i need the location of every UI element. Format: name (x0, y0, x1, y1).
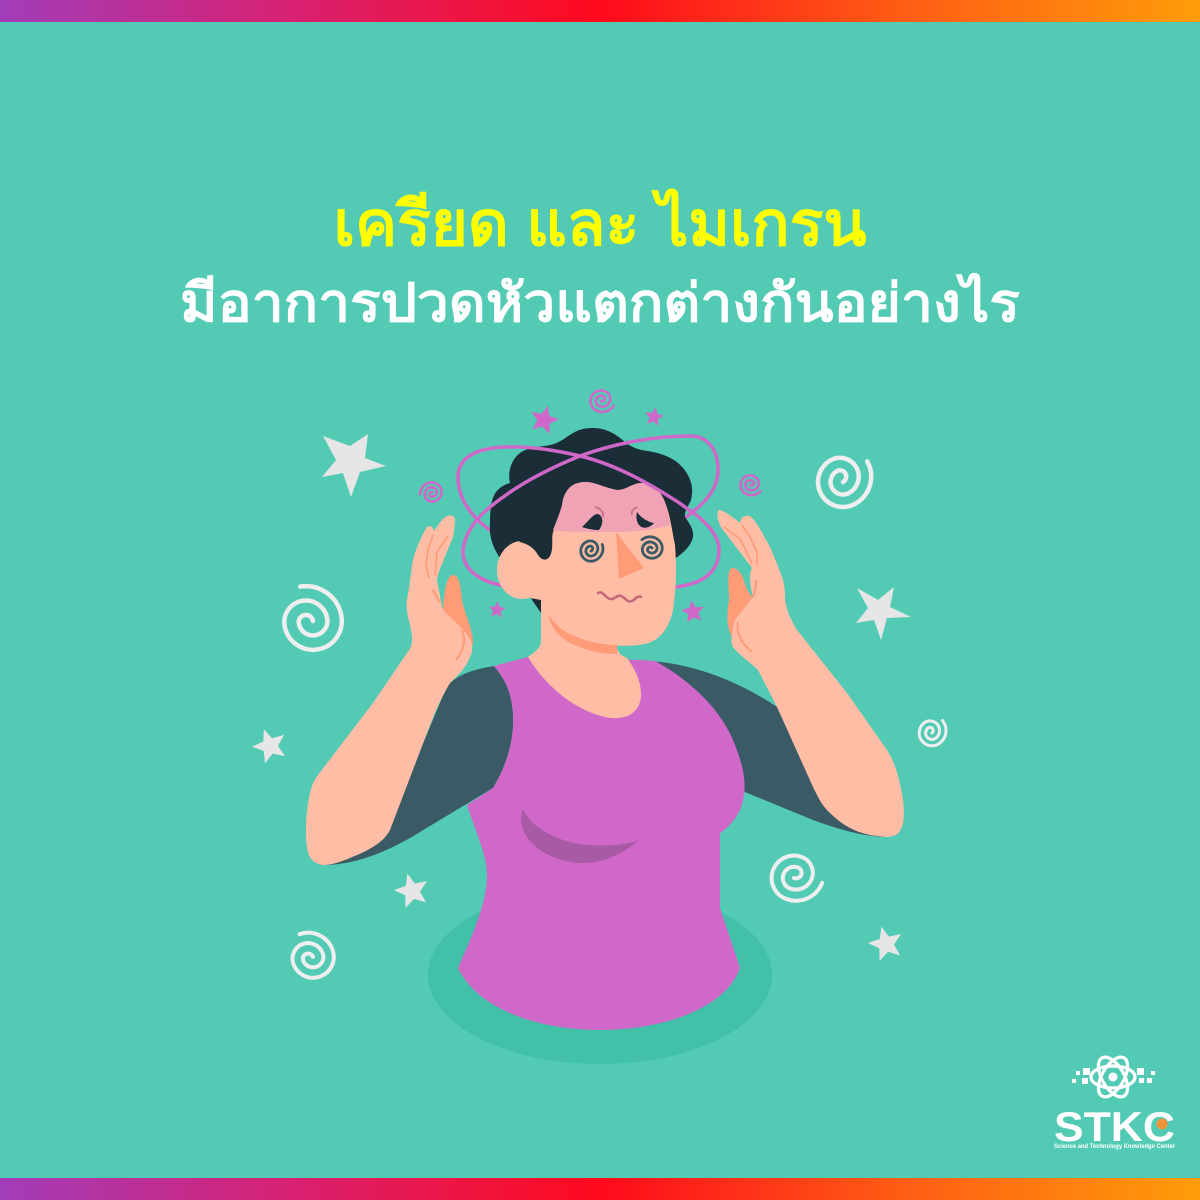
jaw shadow (548, 615, 617, 654)
left sleeve (323, 666, 513, 865)
logo wordmark: STKC (1054, 1103, 1175, 1150)
purple stars and spirals around head (420, 387, 765, 623)
logo: STKC (1054, 1052, 1176, 1150)
hypnotised spiral eyes (578, 532, 666, 564)
wavy mouth (598, 592, 641, 601)
sad eyes (582, 507, 654, 530)
nose (616, 532, 644, 579)
hair (490, 428, 693, 613)
title: เครียด และ ไมเกรน (334, 188, 866, 259)
forehead flush (553, 482, 670, 532)
white decorative stars (248, 434, 911, 963)
hair front lock (500, 480, 565, 560)
face (530, 482, 676, 646)
right hand and forearm (717, 510, 904, 837)
top gradient bar (0, 0, 1200, 22)
dizzy rings, front portion (458, 436, 718, 550)
logo orange dot (1156, 1118, 1168, 1130)
ground shadow (428, 886, 772, 1064)
right sleeve (650, 661, 884, 837)
title (180, 188, 1021, 333)
chest shadow (521, 809, 638, 863)
title: มีอาการปวดหัวแตกต่างกันอย่างไร (180, 272, 1021, 333)
neck and chest skin (528, 600, 641, 718)
bottom gradient bar (0, 1178, 1200, 1200)
dizzy rings, back portion (458, 470, 719, 587)
ear (497, 541, 547, 599)
white decorative spirals (279, 445, 952, 983)
torso and purple top (458, 657, 745, 1030)
left hand and forearm (306, 515, 473, 865)
logo tagline: Science and Technology Knowledge Center (1054, 1144, 1176, 1150)
logo atom icon (1091, 1052, 1135, 1102)
logo pixel squares (1072, 1068, 1155, 1084)
